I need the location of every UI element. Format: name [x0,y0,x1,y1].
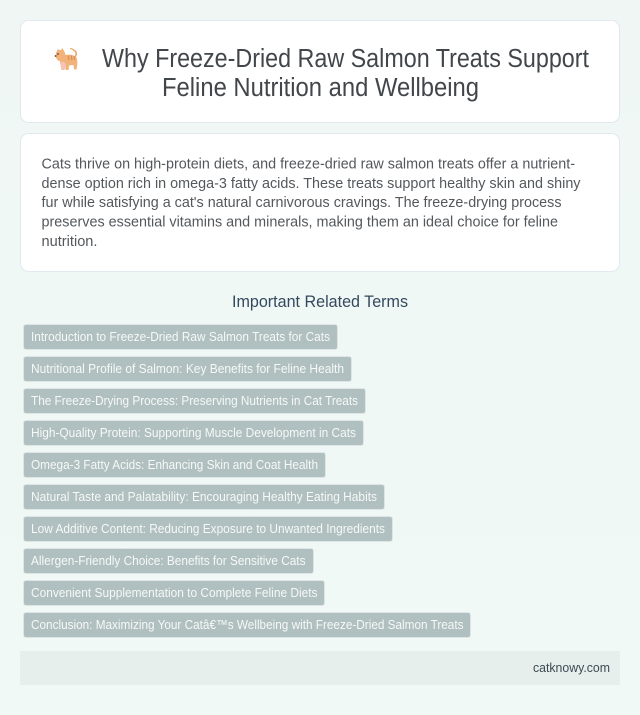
chip 3: The Freeze-Drying Process: Preserving Nutrients in Cat Treats [31,393,358,408]
footer [20,651,620,685]
text block: introduction paragraph: preserves essential vitamins and minerals, making them an ideal choice for feline [42,214,558,230]
chip 8: Allergen-Friendly Choice: Benefits for Sensitive Cats [31,553,306,568]
chip 10: Conclusion: Maximizing Your Catâ€™s Wellbeing with Freeze-Dried Salmon Treats [31,617,464,632]
chip 9: Convenient Supplementation to Complete Feline Diets [31,585,318,600]
chip 5: Omega-3 Fatty Acids: Enhancing Skin and Coat Health [31,457,318,472]
title [102,45,589,102]
text block: introduction paragraph: nutrition. [42,233,98,250]
text block: introduction paragraph: dense option rich in omega-3 fatty acids. These treats support healthy skin and shiny [42,175,581,192]
icon: cat [55,48,77,70]
text block: introduction paragraph: Cats thrive on high-protein diets, and freeze-dried raw salmon treats offer a nutrient- [42,156,575,172]
heading: important related terms: Important Related Terms [232,292,408,311]
chip 7 [24,516,392,542]
panel: introduction [20,134,620,272]
chip 6: Natural Taste and Palatability: Encouraging Healthy Eating Habits [31,489,377,504]
chip 1: Introduction to Freeze-Dried Raw Salmon Treats for Cats [31,329,330,344]
chip 4 [24,420,364,446]
chip 4: High-Quality Protein: Supporting Muscle Development in Cats [31,425,356,440]
title: Why Freeze-Dried Raw Salmon Treats Support [102,45,589,73]
panel: title card [20,20,620,122]
chip 6 [24,484,384,510]
text block: introduction paragraph: fur while satisfying a cat's natural carnivorous cravings. The freeze-drying process [42,194,562,211]
title: Feline Nutrition and Wellbeing [162,74,479,102]
list: related term chips [24,324,470,638]
chip 8 [24,548,314,574]
chip 3 [24,388,366,414]
chip 5 [24,452,326,478]
chip 1 [24,324,338,350]
footer: source site: catknowy.com [533,660,610,675]
chip 2 [24,356,352,382]
text block: introduction paragraph [42,156,581,250]
chip 2: Nutritional Profile of Salmon: Key Benefits for Feline Health [31,361,344,376]
chip 7: Low Additive Content: Reducing Exposure to Unwanted Ingredients [31,521,385,536]
chip 9 [24,580,324,606]
chip 10 [24,612,470,638]
